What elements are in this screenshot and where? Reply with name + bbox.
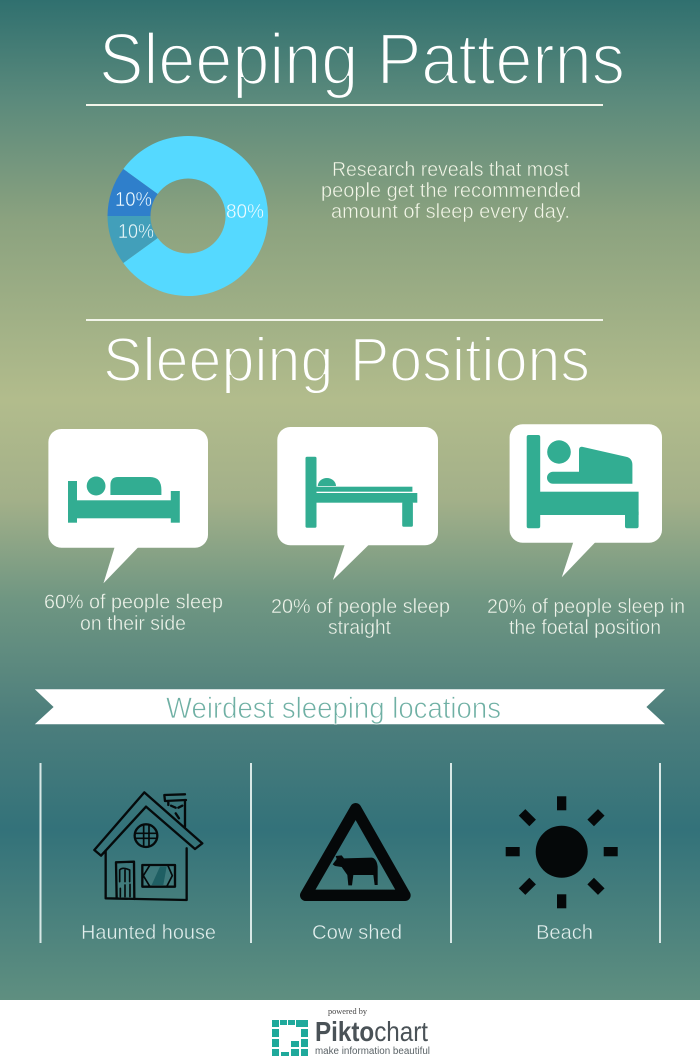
icon: sun (506, 796, 618, 908)
donut chart: 10% (118, 221, 154, 243)
caption: foetal (487, 596, 685, 639)
caption: straight (271, 596, 450, 639)
caption: straight: 20% of people sleep (271, 596, 450, 618)
research text: Research reveals that most (332, 159, 569, 181)
icon: haunted house (94, 792, 202, 900)
footer: Piktochart (315, 1016, 428, 1047)
caption: straight: straight (328, 617, 391, 639)
title: Sleeping Patterns (99, 20, 625, 100)
donut chart: 80% (226, 201, 264, 223)
caption: foetal: 20% of people sleep in (487, 596, 685, 618)
location labels (81, 922, 593, 944)
bubble: straight sleeper (277, 427, 438, 580)
footer: powered by (328, 1006, 368, 1016)
location labels: Cow shed (312, 922, 402, 944)
ribbon banner: Weirdest sleeping locations (166, 692, 501, 725)
donut chart: 10% (115, 189, 152, 211)
caption: side: 60% of people sleep (44, 592, 223, 614)
bubble: side sleeper (48, 429, 208, 583)
caption: side: on their side (80, 613, 186, 635)
research text (321, 159, 581, 223)
footer: make information beautiful (315, 1046, 430, 1057)
bubble: foetal sleeper (510, 424, 662, 577)
logo mark (272, 1020, 308, 1056)
ribbon banner (35, 689, 665, 725)
location labels: Beach (536, 922, 593, 944)
donut chart (108, 136, 268, 296)
research text: people get the recommended (321, 180, 581, 202)
caption: side (44, 592, 223, 635)
heading: sleeping positions: Sleeping Positions (103, 326, 590, 395)
location labels: Haunted house (81, 922, 216, 944)
icon: cow warning sign (306, 809, 405, 895)
research text: amount of sleep every day. (331, 201, 570, 223)
footer (0, 1000, 700, 1064)
caption: foetal: the foetal position (509, 617, 661, 639)
